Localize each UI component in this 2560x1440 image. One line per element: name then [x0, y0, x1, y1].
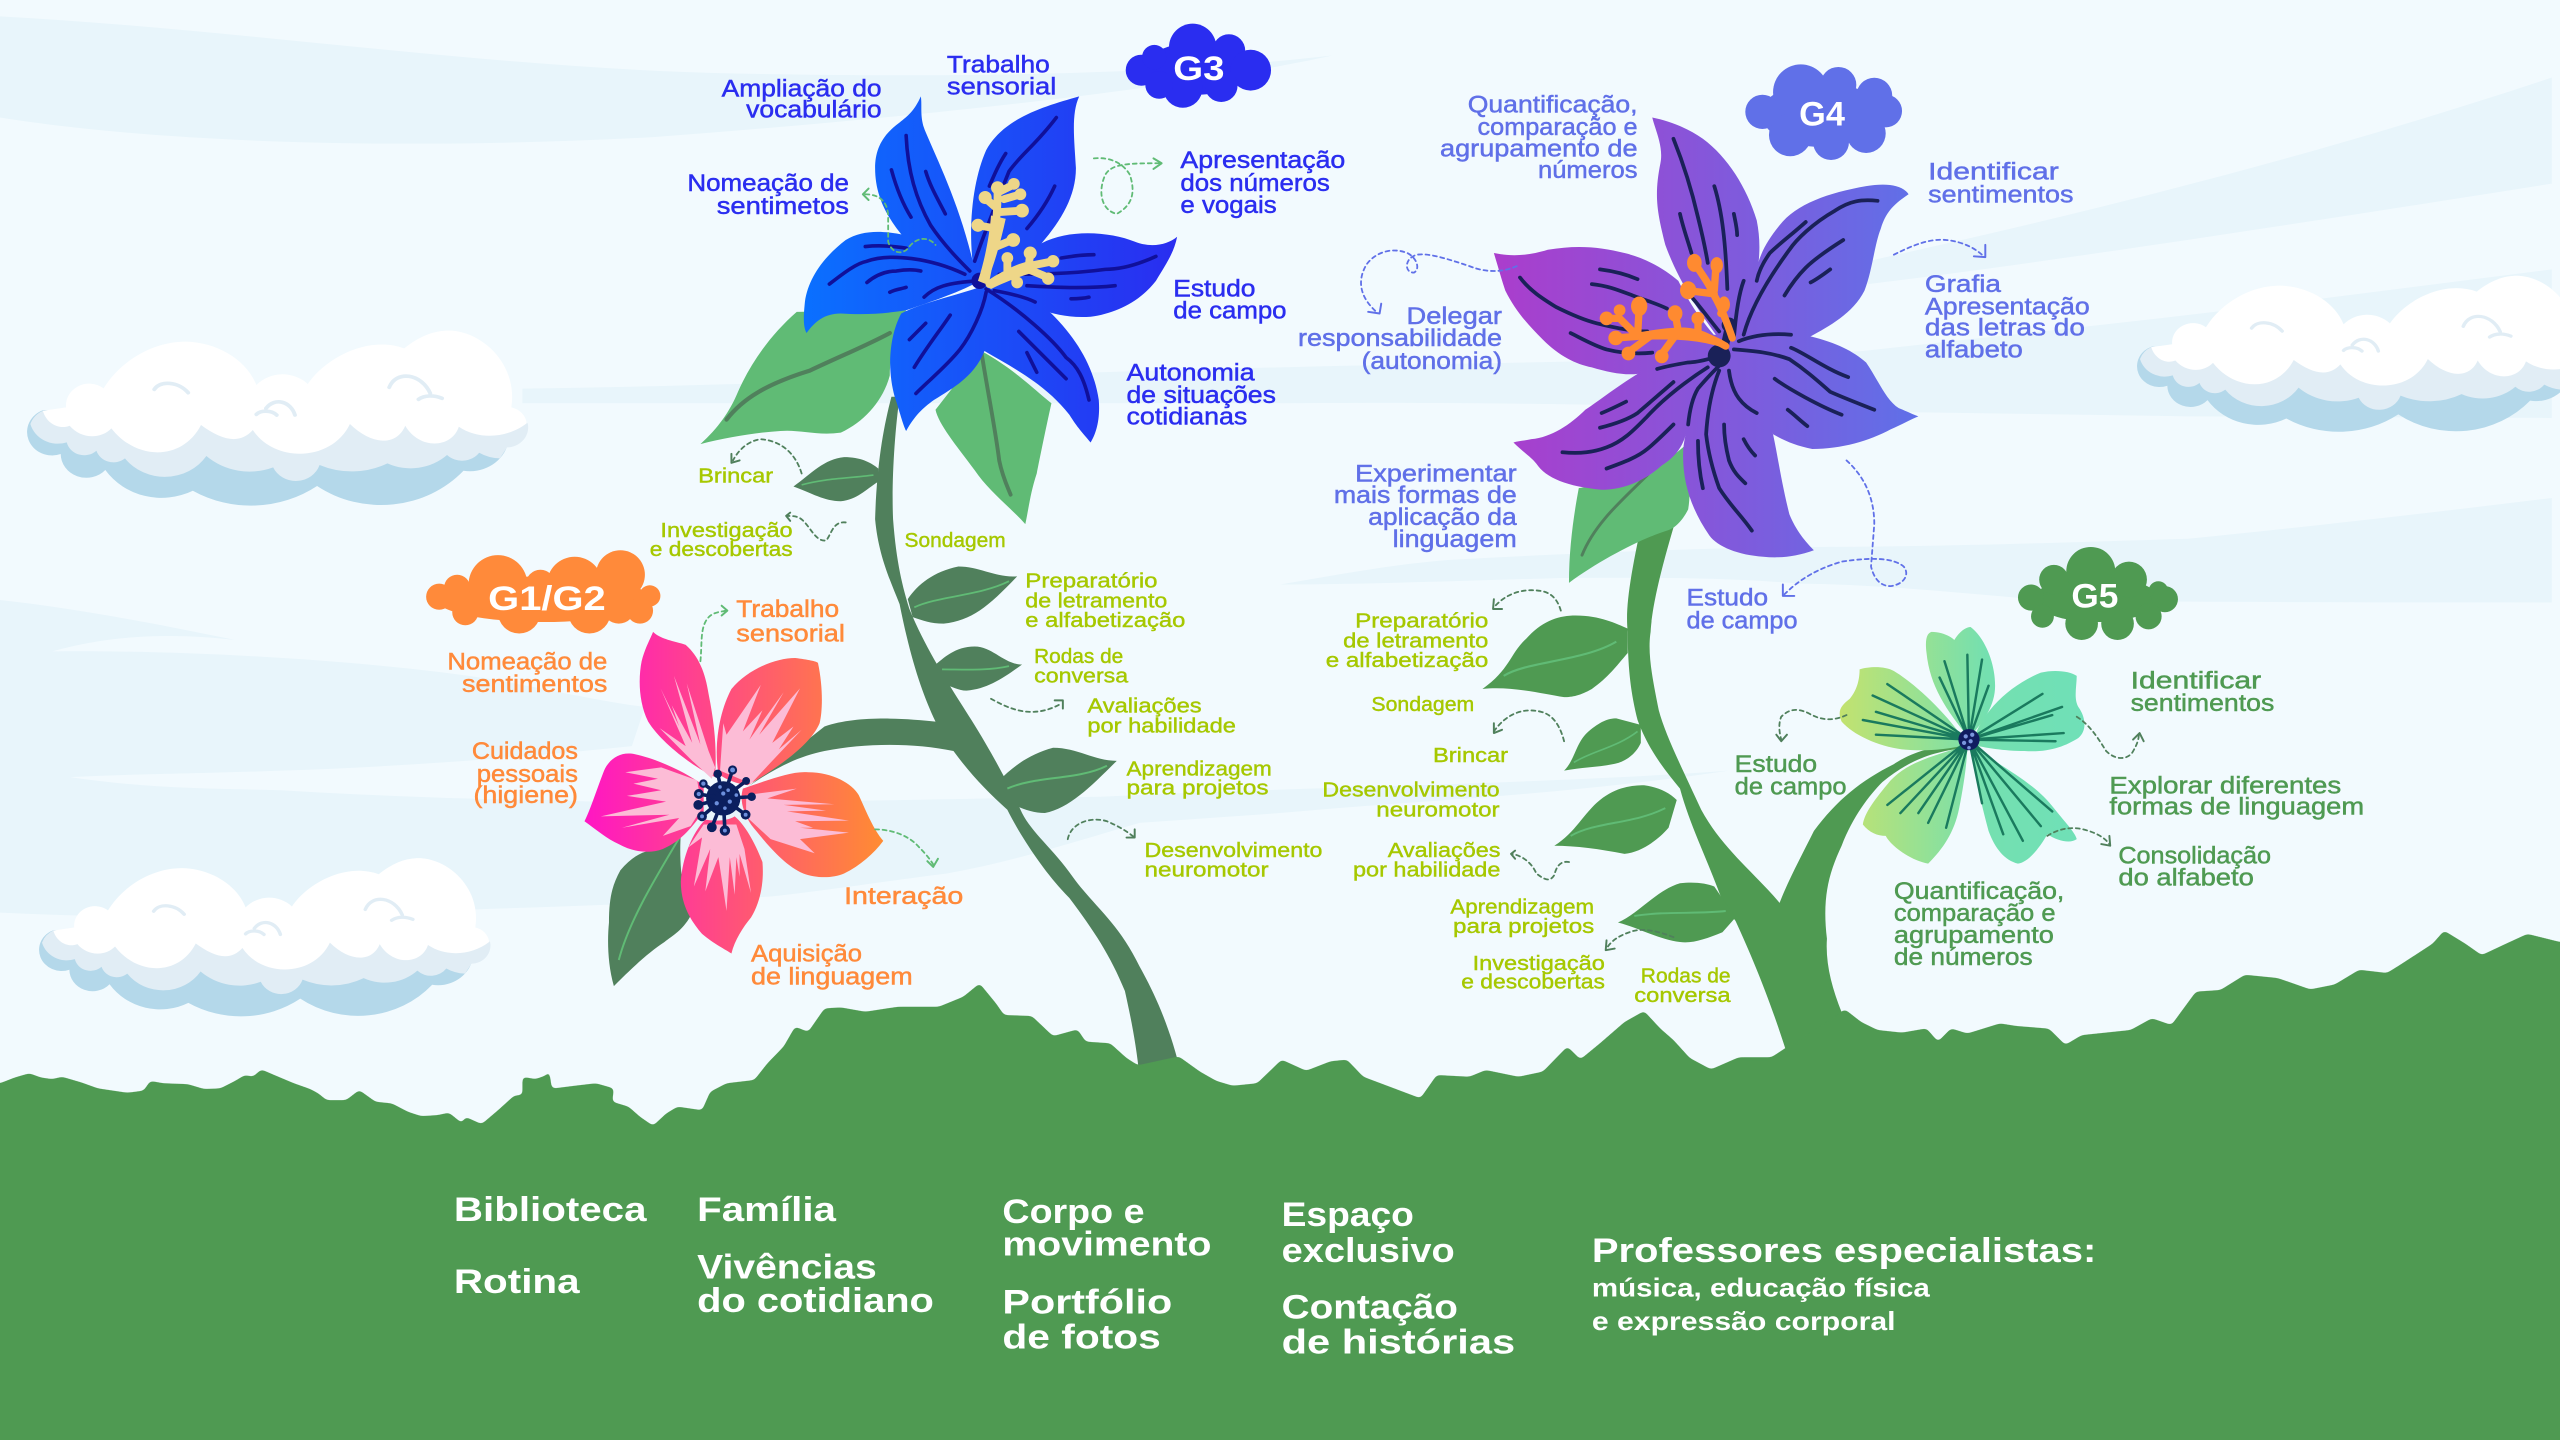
text block: G1/G2 labels: sentimentos: [462, 671, 607, 698]
leaf: Preparatório: [1482, 616, 1628, 697]
text block: footer column 4: Espaço: [1282, 1196, 1414, 1234]
text block: G3 stem labels: Desenvolvimento: [1144, 840, 1322, 862]
panel: G4 flower: [1361, 118, 1985, 950]
leaf: G1/G2: [608, 833, 691, 986]
text block: footer column 2: do cotidiano: [697, 1282, 934, 1320]
stem: G3 and G1/G2: [748, 397, 1182, 1078]
text block: G3 stem labels: Rodas de: [1034, 646, 1123, 668]
cloud: upper left: [27, 331, 528, 506]
text block: G3 labels: Autonomia: [1127, 359, 1255, 386]
arrow: Consolidação: [2047, 828, 2110, 846]
text block: G3 stem labels: Sondagem: [904, 530, 1006, 552]
icon: blue petals: [804, 96, 1177, 442]
stem: G4 and G5: [1627, 490, 1967, 1061]
panel: G4 and G5 plant stem and leaves: [1482, 490, 1967, 1061]
text block: footer column 3: Corpo e: [1002, 1193, 1144, 1231]
text block: G3 labels: Trabalho: [947, 51, 1050, 78]
text block: G4 labels: sentimentos: [1928, 181, 2073, 208]
text block: G3 stem labels: de letramento: [1025, 590, 1167, 612]
text block: G4 labels: (autonomia): [1362, 348, 1502, 375]
text block: G1/G2 labels: de linguagem: [751, 963, 913, 990]
text block: footer column 1: [454, 1191, 648, 1301]
leaf: Brincar: [1564, 718, 1641, 771]
text block: G5 labels: Explorar diferentes: [2109, 772, 2341, 799]
text block: G1/G2 labels: sensorial: [736, 621, 845, 648]
icon: orange stamen: [1600, 254, 1732, 363]
arrow: Preparatório: [1493, 590, 1561, 611]
panel: G1/G2 flower: [584, 606, 1135, 986]
icon: green petals: [1840, 627, 2084, 864]
text block: G4 labels: comparação e: [1478, 114, 1638, 141]
leaf: Aprendizagem: [999, 748, 1117, 813]
text block: G3 labels: de campo: [1173, 297, 1287, 324]
text block: G3 stem labels: conversa: [1034, 665, 1129, 687]
text block: G4 labels: alfabeto: [1925, 337, 2023, 364]
text block: G3 labels: e vogais: [1180, 192, 1277, 219]
icon: green petal veins: [1863, 655, 2064, 841]
text block: G5 labels: do alfabeto: [2118, 865, 2254, 892]
leaf: Desenvolvimento: [1554, 785, 1677, 854]
text block: G4 labels: responsabilidade: [1298, 325, 1502, 352]
leaf: right: [936, 351, 1051, 524]
arrow: Estudo de campo: [1783, 460, 1906, 596]
arrow: Interação: [875, 829, 938, 867]
text block: footer specialists: [1592, 1232, 2096, 1336]
text block: G3 labels: sensorial: [947, 74, 1056, 101]
text block: G3 stem labels: para projetos: [1127, 777, 1269, 799]
text block: G4 stem labels: Preparatório: [1355, 611, 1488, 633]
text block: G4 stem labels: e alfabetização: [1326, 650, 1488, 672]
text block: G4 labels: linguagem: [1393, 526, 1517, 553]
leaf: Aprendizagem: [1618, 883, 1736, 942]
cloud: lower left: [39, 858, 490, 1016]
text block: footer column 1: Biblioteca: [454, 1191, 648, 1229]
text block: G1/G2 labels: Cuidados: [472, 738, 578, 765]
text block: G3 labels: [687, 51, 1345, 430]
text block: G4 stem labels: Rodas de: [1641, 965, 1731, 987]
text block: G3 stem labels: neuromotor: [1144, 860, 1269, 882]
badge: G1/G2: G1/G2: [488, 580, 606, 618]
text block: G3 stem labels: e descobertas: [650, 539, 793, 561]
panel: ground: [0, 931, 2560, 1440]
text block: footer column 1: Rotina: [454, 1263, 581, 1301]
text block: G3 labels: vocabulário: [746, 97, 882, 124]
text block: footer column 3: movimento: [1002, 1226, 1211, 1264]
text block: G1/G2 labels: (higiene): [473, 782, 578, 809]
text block: footer column 4: Contação: [1282, 1288, 1458, 1326]
text block: G4 labels: Grafia: [1925, 271, 2001, 298]
text block: G5 labels: [1735, 667, 2364, 971]
text block: G4 labels: Estudo: [1687, 585, 1768, 612]
text block: G3 labels: de situações: [1127, 382, 1276, 409]
text block: G3 labels: Estudo: [1173, 275, 1256, 302]
text block: footer column 3: de fotos: [1002, 1319, 1161, 1357]
arrow: Investigação: [786, 513, 846, 541]
text block: G4 labels: Identificar: [1928, 159, 2059, 186]
text block: G4 labels: números: [1538, 157, 1638, 184]
text block: G4 labels: aplicação da: [1368, 504, 1517, 531]
text block: G4 stem labels: Desenvolvimento: [1322, 780, 1500, 802]
text block: G4 stem labels: neuromotor: [1376, 799, 1500, 821]
text block: G3 labels: cotidianas: [1127, 403, 1247, 430]
leaf: Brincar: [793, 457, 878, 501]
text block: G3 labels: sentimetos: [717, 193, 849, 220]
text block: G3 labels: Apresentação: [1180, 147, 1345, 174]
text block: footer column 2: Vivências: [697, 1248, 877, 1286]
text block: G3 stem labels: Avaliações: [1087, 696, 1202, 718]
text block: G1/G2 labels: Nomeação de: [447, 648, 607, 675]
leaf: G4: [1569, 446, 1690, 583]
text block: G4 stem labels: para projetos: [1453, 916, 1594, 938]
arrow: Estudo de campo: [1776, 710, 1847, 741]
icon: blue petal veins: [829, 118, 1156, 400]
leaf: Rodas de conversa: [934, 647, 1022, 691]
badge: G1/G2: [426, 550, 660, 633]
text block: footer column 2: Família: [697, 1191, 837, 1229]
panel: G3 flower: [700, 96, 1177, 541]
panel: G3 plant stem and leaves: [748, 397, 1182, 1078]
text block: footer column 3: Portfólio: [1002, 1283, 1172, 1321]
badge: G5: [2018, 547, 2178, 640]
text block: G1/G2 labels: Interação: [844, 883, 963, 910]
text block: G5 labels: de números: [1894, 944, 2033, 971]
text block: G4 labels: Experimentar: [1355, 460, 1517, 487]
text block: G3 stem labels: [650, 465, 1322, 882]
text block: G5 labels: Consolidação: [2118, 843, 2271, 870]
arrow: Desenvolvimento: [1068, 820, 1135, 839]
icon: purple petals: [1494, 118, 1918, 557]
arrow: Avaliações: [991, 699, 1063, 712]
text block: G5 labels: Estudo: [1735, 751, 1817, 778]
arrow: Identificar: [2077, 717, 2144, 758]
arrow: Nomeação: [863, 189, 936, 252]
text block: G3 labels: Ampliação do: [722, 75, 882, 102]
text block: G3 stem labels: Aprendizagem: [1127, 759, 1272, 781]
text block: G4 stem labels: conversa: [1634, 985, 1731, 1007]
icon: green flower centre: [1958, 729, 1980, 750]
text block: G5 labels: Identificar: [2131, 667, 2261, 694]
text block: footer column 3: [1002, 1193, 1211, 1357]
text block: footer specialists: Professores especialistas:: [1592, 1232, 2096, 1270]
icon: navy stamen: [693, 765, 756, 836]
cloud: right: [2137, 276, 2560, 432]
arrow: Sondagem: [1494, 710, 1564, 741]
text block: G1/G2 labels: Trabalho: [736, 596, 839, 623]
text block: G4 labels: de campo: [1687, 608, 1798, 635]
text block: footer specialists: música, educação física: [1592, 1272, 1930, 1302]
text block: G4 labels: das letras do: [1925, 315, 2085, 342]
text block: G4 stem labels: Sondagem: [1371, 694, 1474, 716]
arrow: Delegar: [1361, 250, 1517, 313]
text block: G4 stem labels: Avaliações: [1388, 840, 1500, 862]
text block: G3 labels: dos números: [1180, 170, 1330, 197]
text block: G3 labels: Nomeação de: [687, 170, 849, 197]
text block: footer column 2: [697, 1191, 934, 1320]
text block: G3 stem labels: Investigação: [660, 520, 793, 542]
leaf: large left: [700, 310, 906, 444]
text block: G4 labels: Apresentação: [1925, 293, 2090, 320]
icon: pale petal centres: [601, 676, 849, 911]
text block: G4 labels: mais formas de: [1334, 482, 1517, 509]
text block: G4 stem labels: Brincar: [1433, 745, 1508, 767]
icon: purple petal veins: [1520, 139, 1878, 531]
text block: G1/G2 labels: Aquisição: [751, 941, 862, 968]
text block: G4 stem labels: por habilidade: [1353, 860, 1500, 882]
text block: G4 stem labels: [1322, 611, 1731, 1007]
badge: G5: G5: [2071, 577, 2118, 615]
text block: G5 labels: agrupamento: [1894, 922, 2054, 949]
badge: G3: [1126, 24, 1271, 108]
text block: G4 labels: agrupamento de: [1440, 136, 1638, 163]
text block: G5 labels: comparação e: [1894, 900, 2056, 927]
text block: G4 labels: Delegar: [1407, 303, 1502, 330]
text block: G1/G2 labels: [447, 596, 963, 990]
badge: G4: G4: [1799, 95, 1845, 133]
arrow: Avaliações: [1511, 851, 1569, 879]
text block: G1/G2 labels: pessoais: [477, 761, 578, 788]
text block: G4 labels: Quantificação,: [1468, 92, 1638, 119]
arrow: Apresentação: [1094, 158, 1162, 214]
text block: footer column 4: exclusivo: [1282, 1232, 1455, 1270]
arrow: Identificar: [1894, 240, 1985, 257]
text block: G3 stem labels: por habilidade: [1087, 715, 1236, 737]
arrow: Investigação: [1606, 930, 1673, 950]
text block: G3 stem labels: Brincar: [698, 465, 773, 487]
text block: G5 labels: formas de linguagem: [2109, 794, 2364, 821]
text block: G5 labels: de campo: [1735, 774, 1847, 801]
text block: footer column 4: [1282, 1196, 1515, 1361]
text block: G4 stem labels: Aprendizagem: [1450, 896, 1594, 918]
leaf: Preparatório: [908, 567, 1017, 624]
text block: G5 labels: Quantificação,: [1894, 878, 2064, 905]
arrow: Brincar: [731, 439, 802, 473]
text block: G3 stem labels: Preparatório: [1025, 571, 1158, 593]
badge: G3: G3: [1173, 50, 1224, 88]
text block: footer column 4: de histórias: [1282, 1323, 1515, 1361]
text block: footer specialists: e expressão corporal: [1592, 1306, 1896, 1336]
text block: G4 labels: [1298, 92, 2090, 635]
text block: G3 stem labels: e alfabetização: [1025, 610, 1185, 632]
text block: G5 labels: sentimentos: [2131, 690, 2274, 717]
arrow: Trabalho sensorial: [700, 606, 727, 661]
text block: G4 stem labels: Investigação: [1473, 953, 1605, 975]
panel: G5 flower: [1776, 627, 2144, 864]
icon: yellow stamen: [971, 178, 1059, 289]
text block: G4 stem labels: de letramento: [1343, 631, 1488, 653]
icon: pink petals: [584, 632, 883, 953]
badge: G4: [1745, 64, 1902, 160]
text block: G4 stem labels: e descobertas: [1461, 971, 1605, 993]
